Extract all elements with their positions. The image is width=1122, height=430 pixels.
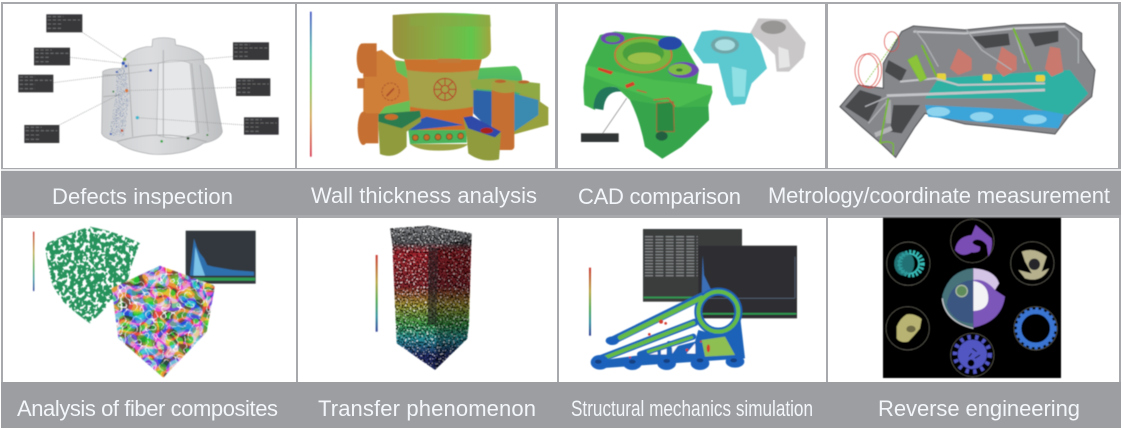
caption: Transfer phenomenon: Transfer phenomenon [318,396,536,421]
lead line [603,98,627,133]
engine dark cavities [845,31,1058,133]
caption: Defects inspection: Defects inspection [52,184,233,209]
purple cam [955,225,992,257]
bracket members [597,292,738,360]
indigo gear [958,340,987,369]
panel: reverse engineering image [883,218,1061,378]
foam cube [45,227,140,323]
caption: CAD comparison: CAD comparison [578,184,741,209]
panel: fiber composites image [33,227,256,379]
cyan mesh part [693,30,767,105]
teal gear [899,252,922,275]
left gauge [382,83,399,100]
caption: Wall thickness analysis: Wall thickness analysis [311,183,537,208]
caption: Structural mechanics simulation: Structural mechanics simulation [571,396,813,421]
stress hot zone [702,337,735,357]
engine body [840,23,1095,157]
light rails [865,27,1078,135]
colour bar [589,268,591,336]
stress marks [629,320,710,358]
upper cylinder [393,13,491,59]
right side shade [435,235,472,370]
front right boss [463,117,501,160]
colour bar [376,255,378,332]
black backdrop [883,218,1061,378]
panel: metrology image [840,23,1095,157]
chart window [698,246,797,318]
beige plate [1018,250,1049,280]
caption: Analysis of fiber composites: Analysis of fiber composites [17,396,278,421]
table window [643,229,742,302]
panel: wall thickness analysis image [310,12,548,160]
callout boxes [18,14,279,143]
arch under wing [593,87,622,110]
right ear [512,83,548,135]
caption: Metrology/coordinate measurement: Metrology/coordinate measurement [768,183,1110,208]
khaki casting [897,314,922,342]
left housing [363,50,413,115]
casting ribs and rim [103,50,208,142]
bottom strip with bolt holes [408,117,463,131]
yellow plugs [937,73,1045,82]
groove [428,247,438,325]
right flange and tube [473,90,492,132]
callout text rows [20,17,277,139]
centre disc right [973,268,1005,328]
panel: transfer phenomenon image [376,226,472,370]
panel: CAD comparison image [581,18,806,159]
purple bosses [601,32,625,44]
bolt lugs [591,336,744,370]
green probes [865,28,1032,155]
medallion [434,78,456,100]
front left boss [378,111,421,156]
wing edge [586,65,712,107]
grey scan part [750,18,806,72]
water jacket [925,105,1065,128]
defect cloud [109,67,129,137]
bracket web [592,318,745,368]
segmented grain cube [110,264,217,379]
panel: defects inspection image [18,14,279,154]
central barrel [404,59,482,132]
panel: structural mechanics simulation image [589,229,797,370]
porous column [390,226,472,370]
left bosses [357,43,378,145]
pink chambers [950,47,1063,77]
bracket green bands [605,292,738,358]
casting body [102,38,222,154]
red measurement rings [855,32,899,88]
callout label [581,133,619,142]
centre disc left [942,268,973,328]
red deviation marks [598,67,635,88]
teal coolant [925,70,1088,115]
colour bar [33,232,34,291]
part circles [886,219,1057,377]
colour scale [310,12,312,157]
histogram window [186,231,256,283]
caption: Reverse engineering: Reverse engineering [878,396,1080,421]
truss openings [640,337,697,354]
leader lines [53,32,269,125]
green part silhouette [583,32,712,159]
casting inner core [157,60,197,138]
defect markers [110,58,208,143]
rear green housing [473,66,522,135]
blue ring gear [1019,312,1052,345]
